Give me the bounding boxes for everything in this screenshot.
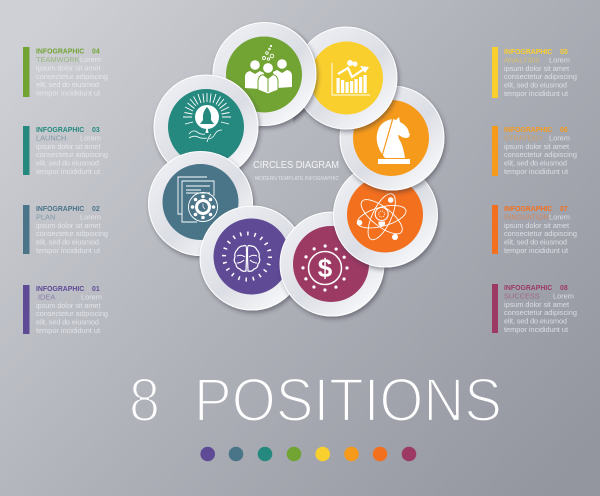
circle: analysis — [295, 27, 397, 129]
icon: brain — [224, 234, 270, 280]
text block 07 innovation — [492, 205, 577, 255]
text block 08 success: ipsum dolor sit amet — [504, 300, 569, 309]
text block 02 plan: ipsum dolor sit amet — [36, 221, 100, 230]
circle: strategy — [340, 86, 444, 190]
text block 06 strategy: tempor incididunt ut — [504, 167, 568, 176]
text block 03 launch: 03 — [92, 127, 100, 134]
text block 01 idea: tempor incididunt ut — [36, 326, 100, 335]
text block 07 innovation: Lorem — [549, 212, 570, 221]
text block 02 plan: consectetur adipiscing — [36, 229, 108, 238]
circle: teamwork — [213, 22, 316, 126]
text block 08 success: INFOGRAPHIC — [504, 285, 552, 292]
icon: team — [245, 45, 292, 94]
text block 03 launch: consectetur adipiscing — [36, 150, 108, 159]
text block 08 success — [492, 284, 577, 334]
text block 05 analysis — [492, 47, 577, 98]
color dots legend — [200, 447, 416, 461]
title: POSITIONS — [194, 366, 502, 434]
circle: launch — [154, 75, 258, 179]
icon: atom and bulb — [355, 190, 408, 243]
circle: plan — [148, 152, 252, 256]
text block 02 plan: tempor incididunt ut — [36, 246, 100, 255]
text block 05 analysis: ANALYSIS — [504, 55, 540, 64]
text block 07 innovation: 07 — [560, 206, 568, 213]
text block 05 analysis: 05 — [560, 49, 568, 56]
icon: chess knight — [377, 117, 410, 164]
circle: teamwork overlap over analysis — [293, 30, 321, 124]
center heading: CIRCLES DIAGRAM — [253, 160, 339, 171]
text block 06 strategy — [492, 126, 577, 176]
text block 08 success: elit, sed do eiusmod — [504, 317, 567, 326]
text block 06 strategy: 06 — [560, 127, 568, 134]
text block 04 teamwork: INFOGRAPHIC — [36, 48, 84, 56]
text block 05 analysis: elit, sed do eiusmod — [504, 81, 567, 90]
text block 07 innovation: ipsum dolor sit amet — [504, 221, 569, 230]
title: 8 — [129, 366, 160, 434]
text block 01 idea: ipsum dolor sit amet — [36, 301, 100, 310]
text block 04 teamwork: tempor incididunt ut — [36, 89, 100, 98]
text block 01 idea: elit, sed do eiusmod — [36, 318, 99, 327]
text block 05 analysis: tempor incididunt ut — [504, 89, 568, 98]
text block 06 strategy: elit, sed do eiusmod — [504, 159, 567, 168]
icon: documents and gear — [178, 177, 218, 222]
text block 03 launch: INFOGRAPHIC — [36, 127, 84, 134]
text block 07 innovation: INFOGRAPHIC — [504, 206, 552, 213]
text block 01 idea: INFOGRAPHIC — [36, 286, 84, 293]
text block 03 launch: elit, sed do eiusmod — [36, 159, 99, 168]
text block 07 innovation: consectetur adipiscing — [504, 229, 577, 238]
text block 03 launch — [23, 126, 108, 176]
text block 05 analysis: Lorem — [549, 55, 570, 64]
text block 01 idea: consectetur adipiscing — [36, 309, 108, 318]
text block 02 plan: Lorem — [80, 212, 101, 221]
text block 01 idea: 01 — [92, 286, 100, 293]
center heading — [253, 160, 339, 182]
circle: idea — [200, 206, 304, 310]
text block 03 launch: ipsum dolor sit amet — [36, 142, 100, 151]
text block 04 teamwork: 04 — [92, 48, 100, 56]
text block 06 strategy: consectetur adipiscing — [504, 150, 577, 159]
text block 06 strategy: Lorem — [549, 133, 570, 142]
icon: growth chart — [332, 60, 370, 95]
circle: innovation — [334, 163, 438, 267]
text block 01 idea — [23, 285, 108, 335]
text block 06 strategy: STRATEGY — [504, 133, 543, 142]
text block 02 plan: elit, sed do eiusmod — [36, 238, 99, 247]
text block 07 innovation: tempor incididunt ut — [504, 246, 568, 255]
text block 04 teamwork — [23, 47, 108, 98]
text block 07 innovation: elit, sed do eiusmod — [504, 238, 567, 247]
text block 05 analysis: consectetur adipiscing — [504, 72, 577, 81]
text block 02 plan: 02 — [92, 206, 100, 213]
text block 03 launch: tempor incididunt ut — [36, 167, 100, 176]
text block 02 plan — [23, 205, 108, 255]
text block 02 plan: PLAN — [36, 212, 55, 221]
text block 04 teamwork: consectetur adipiscing — [36, 72, 108, 81]
text block 07 innovation: INNOVATION — [504, 212, 549, 221]
text block 01 idea: Lorem — [81, 292, 102, 301]
text block 08 success: 08 — [560, 285, 568, 292]
text block 04 teamwork: Lorem — [80, 55, 101, 64]
text block 08 success: SUCCESS — [504, 291, 540, 300]
text block 03 launch: LAUNCH — [36, 133, 66, 142]
center heading: MODERN TEMPLATE INFOGRAPHIC — [255, 176, 339, 182]
text block 01 idea: IDEA — [38, 292, 55, 301]
text block 08 success: Lorem — [553, 291, 574, 300]
icon: rocket — [183, 93, 231, 142]
text block 08 success: tempor incididunt ut — [504, 325, 568, 334]
icon: dollar coin: $ — [318, 253, 333, 283]
text block 06 strategy: ipsum dolor sit amet — [504, 142, 569, 151]
text block 08 success: consectetur adipiscing — [504, 308, 577, 317]
text block 03 launch: Lorem — [80, 133, 101, 142]
text block 04 teamwork: elit, sed do eiusmod — [36, 80, 99, 89]
text block 06 strategy: INFOGRAPHIC — [504, 127, 552, 134]
circle: success — [280, 212, 384, 316]
text block 04 teamwork: ipsum dolor sit amet — [36, 63, 100, 72]
text block 05 analysis: INFOGRAPHIC — [504, 49, 552, 56]
text block 05 analysis: ipsum dolor sit amet — [504, 64, 569, 73]
text block 04 teamwork: TEAMWORK — [36, 55, 80, 64]
text block 02 plan: INFOGRAPHIC — [36, 206, 84, 213]
